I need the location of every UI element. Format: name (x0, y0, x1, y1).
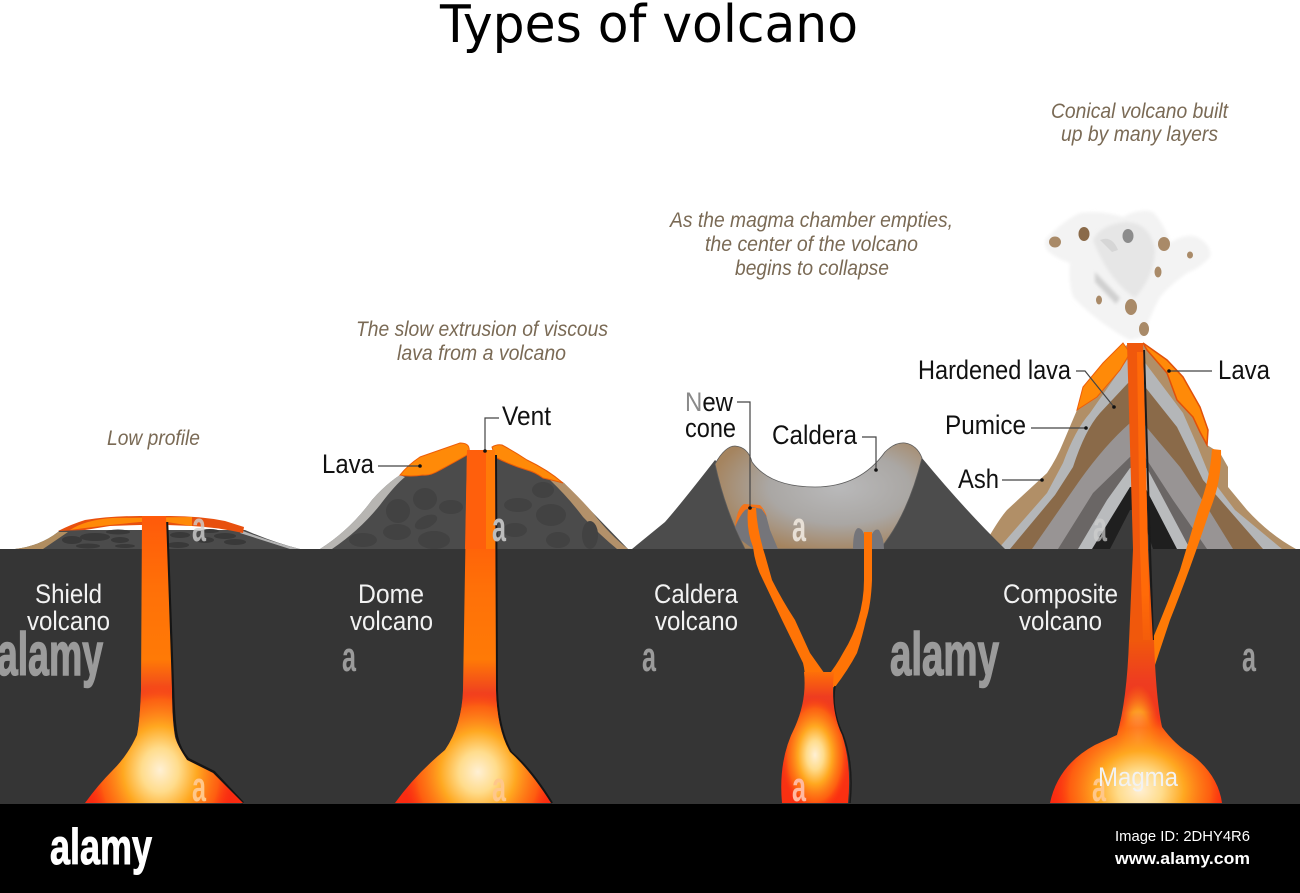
watermark marks: alamy (890, 621, 999, 688)
label: composite Lava with leader (1167, 355, 1271, 385)
label: Caldera volcano: Caldera (654, 579, 739, 609)
composite side vent branch (1150, 449, 1221, 668)
label: Caldera with leader: Caldera (772, 420, 858, 450)
watermark marks: a (192, 503, 206, 550)
label: Dome volcano (350, 579, 433, 636)
caption: caldera volcano: As the magma chamber empties, (668, 209, 953, 232)
label: Pumice with leader: Pumice (945, 410, 1026, 440)
watermark marks: alamy (0, 621, 103, 688)
caldera new cone and side vent (735, 504, 884, 549)
watermark marks: a (342, 633, 356, 680)
label: Shield volcano: Shield (35, 579, 102, 609)
label: dome Lava with leader (322, 449, 422, 479)
label: composite Lava with leader: Lava (1218, 355, 1271, 385)
dome volcano cone (320, 443, 628, 549)
dome conduit and magma chamber (395, 450, 553, 804)
label: Composite volcano: Composite (1003, 579, 1118, 609)
footer image id (1114, 828, 1250, 868)
label: Shield volcano: volcano (27, 606, 110, 636)
label: Hardened lava with leader: Hardened lava (918, 355, 1072, 385)
caption: composite volcano: up by many layers (1061, 123, 1218, 146)
footer image id: Image ID: 2DHY4R6 (1115, 828, 1250, 845)
watermark marks: a (492, 503, 506, 550)
label: Hardened lava with leader (918, 355, 1116, 409)
watermark marks: a (492, 763, 506, 810)
label: New cone with leader (685, 387, 752, 510)
label: Dome volcano: volcano (350, 606, 433, 636)
watermark marks: a (792, 763, 806, 810)
shield volcano cone (15, 516, 300, 549)
label: Composite volcano (1003, 579, 1118, 636)
caption: caldera volcano (668, 209, 953, 280)
watermark marks: a (192, 763, 206, 810)
label: Ash with leader: Ash (958, 464, 999, 494)
watermark marks: a (1092, 763, 1106, 810)
watermark marks (0, 503, 1256, 810)
label: Magma: Magma (1098, 762, 1179, 792)
caption: dome volcano: lava from a volcano (397, 342, 566, 365)
label: Caldera with leader (772, 420, 878, 472)
label: Composite volcano: volcano (1019, 606, 1102, 636)
label: Caldera volcano: volcano (655, 606, 738, 636)
watermark marks: a (792, 503, 806, 550)
caption: composite volcano: Conical volcano built (1051, 100, 1229, 123)
caption: composite volcano (1051, 100, 1229, 146)
label: Shield volcano (27, 579, 110, 636)
label: Dome volcano: Dome (358, 579, 424, 609)
caption: caldera volcano: begins to collapse (735, 257, 889, 280)
eruption plume (1045, 211, 1210, 340)
black footer band (0, 804, 1300, 893)
caption: caldera volcano: the center of the volcano (705, 233, 918, 256)
footer logo: alamy (50, 819, 152, 875)
caldera magma chamber (781, 672, 852, 803)
composite volcano layers (990, 345, 1296, 549)
caption: dome volcano (356, 318, 608, 365)
caldera conduit branches (748, 508, 872, 690)
label: Vent with leader (483, 401, 551, 453)
caption: shield volcano: Low profile (107, 427, 200, 450)
label: Vent with leader: Vent (502, 401, 551, 431)
composite main conduit and magma chamber (1050, 330, 1222, 803)
shield conduit and magma chamber (85, 516, 244, 804)
label: dome Lava with leader: Lava (322, 449, 375, 479)
label: Pumice with leader (945, 410, 1088, 440)
watermark marks: a (1093, 503, 1107, 550)
label: New cone with leader: cone (685, 413, 736, 443)
composite lava flows (1077, 343, 1208, 445)
label: New cone with leader: New (685, 387, 733, 417)
label: Ash with leader (958, 464, 1044, 494)
footer image id: www.alamy.com (1114, 849, 1250, 868)
label: Caldera volcano (654, 579, 739, 636)
watermark marks: a (1242, 633, 1256, 680)
caption: dome volcano: The slow extrusion of viscous (356, 318, 608, 341)
ground cross-section (0, 549, 1300, 804)
watermark marks: a (642, 633, 656, 680)
caldera volcano cone (632, 443, 1005, 549)
